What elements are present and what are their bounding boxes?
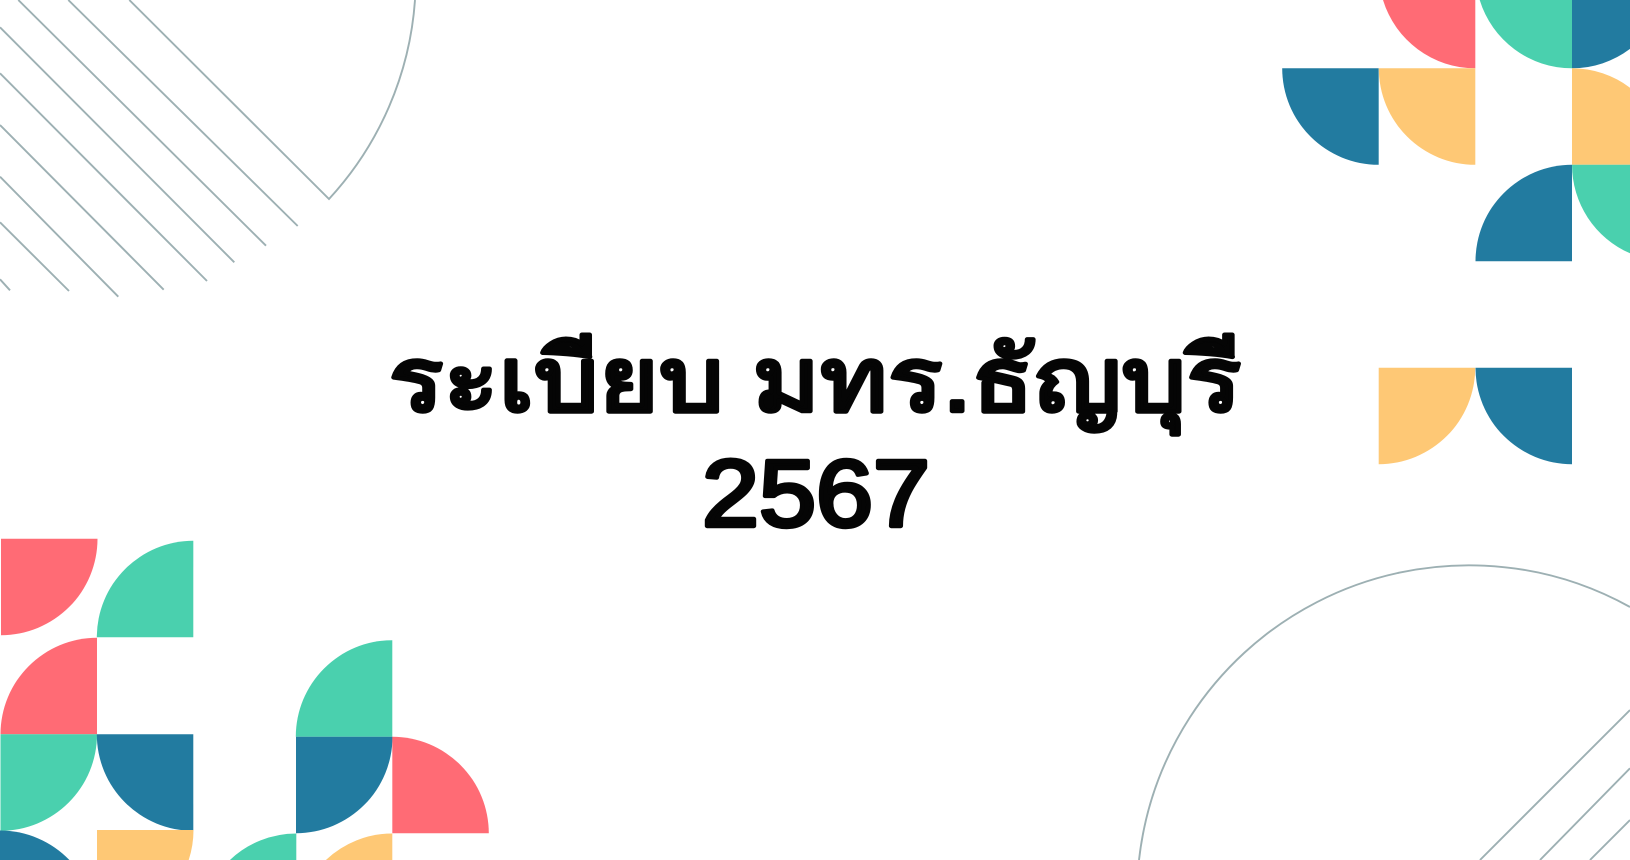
- title: [388, 331, 1242, 547]
- line art: top-left circle with diagonal lines: [0, 0, 415, 297]
- title line 2: year: 2567: [702, 441, 930, 547]
- title line 1: ระเบียบ มทร.ธัญบุรี: [388, 331, 1242, 435]
- line art: bottom-right circle with diagonal lines: [1139, 565, 1630, 860]
- geometric shapes: middle-right pair: [1379, 368, 1572, 464]
- geometric shapes: top-right cluster: [1282, 0, 1630, 261]
- geometric shapes: bottom-left cluster: [0, 539, 194, 860]
- geometric shapes: bottom-centre-left cluster: [230, 640, 489, 860]
